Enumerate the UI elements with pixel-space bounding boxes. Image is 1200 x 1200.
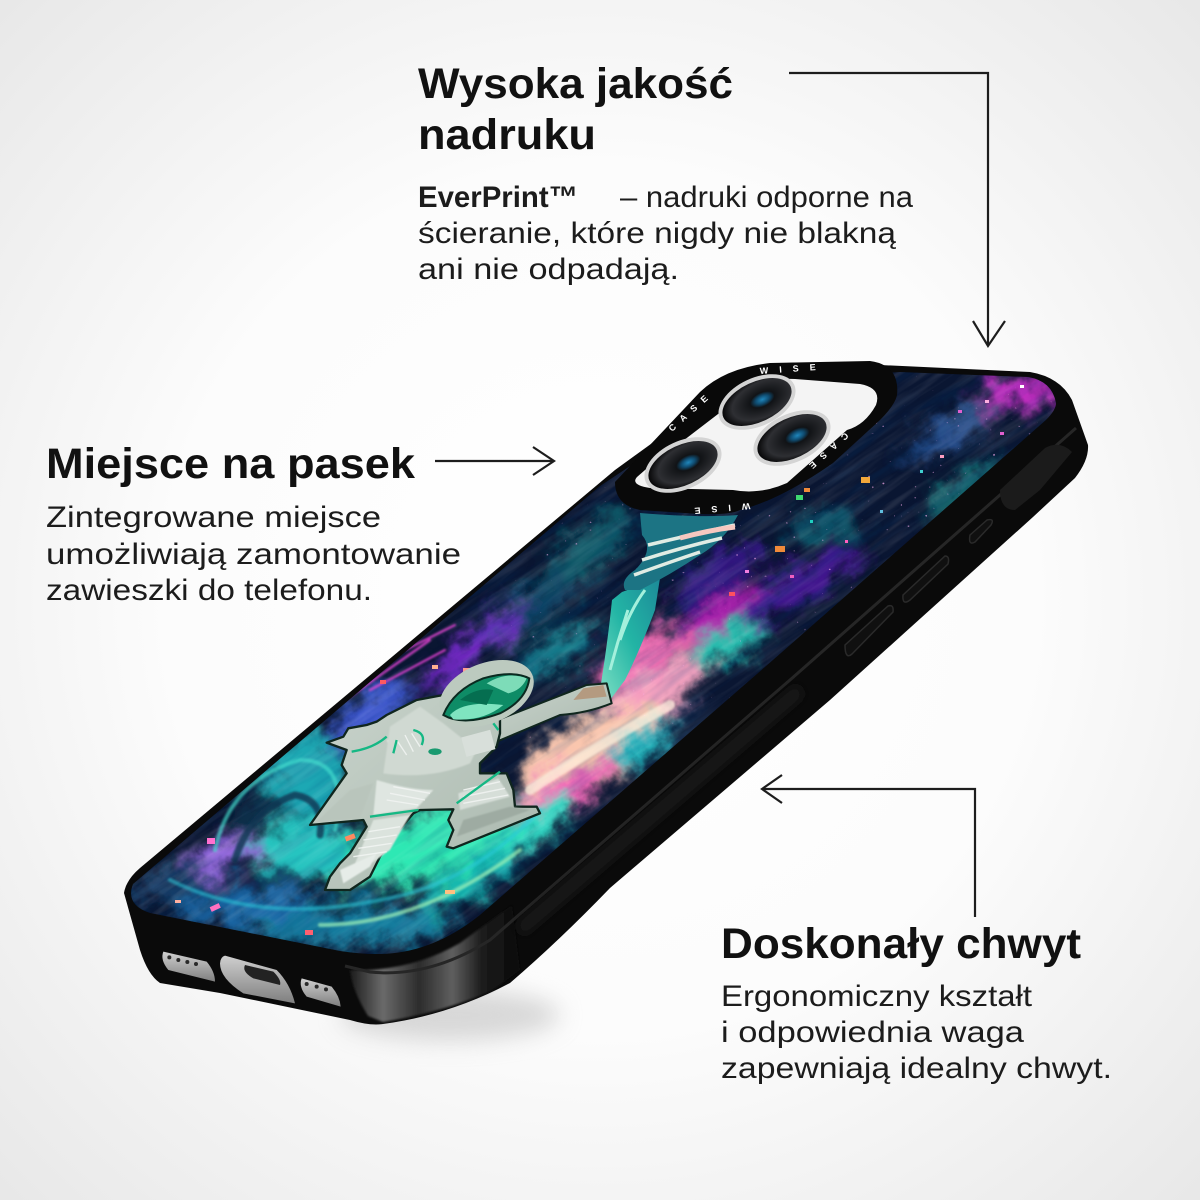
text block: strap slot: umożliwiają zamontowanie xyxy=(46,538,461,571)
text block: print quality xyxy=(418,181,913,286)
ports xyxy=(162,952,341,1007)
text block: print quality: ani nie odpadają. xyxy=(418,253,679,286)
camera glass xyxy=(635,379,877,491)
printed artwork xyxy=(131,361,1056,954)
arrow: grip xyxy=(762,775,975,917)
heading: grip: Doskonały chwyt xyxy=(721,920,1081,968)
text block: print quality: EverPrint™ xyxy=(418,181,578,214)
brand lettering: WISE xyxy=(759,361,827,376)
star specks xyxy=(512,376,1052,738)
text block: grip: Ergonomiczny kształt xyxy=(721,980,1033,1013)
brand lettering xyxy=(667,361,850,517)
text block: strap slot xyxy=(46,501,461,607)
text block: print quality: ścieranie, które nigdy nie blakną xyxy=(418,217,896,250)
text block: grip: zapewniają idealny chwyt. xyxy=(721,1052,1112,1085)
heading: print quality xyxy=(418,60,733,159)
phone in case xyxy=(124,361,1088,1024)
case rim highlight xyxy=(345,428,1076,973)
text block: strap slot: zawieszki do telefonu. xyxy=(46,574,372,607)
side buttons xyxy=(845,445,1072,656)
swirl strokes xyxy=(170,625,670,925)
brand lettering: CASE xyxy=(801,431,850,476)
astronaut xyxy=(310,647,612,890)
astronaut: arm xyxy=(493,683,612,742)
speaker right xyxy=(301,978,341,1007)
case body xyxy=(124,362,1088,1024)
text block: print quality: – nadruki odporne na xyxy=(620,181,913,214)
heading: print quality: Wysoka jakość xyxy=(418,60,733,108)
directional brush streaks xyxy=(132,372,1054,954)
text block: strap slot: Zintegrowane miejsce xyxy=(46,501,381,534)
text block: grip: i odpowiednia waga xyxy=(721,1016,1024,1049)
lens: left xyxy=(636,426,730,504)
arrow: strap slot xyxy=(435,447,554,475)
arrow: print quality xyxy=(789,73,1005,346)
side wall texture xyxy=(520,690,800,930)
astronaut: suit shading xyxy=(340,707,528,884)
heading: print quality: nadruku xyxy=(418,111,596,159)
USB port xyxy=(220,956,295,1003)
water stream and tornado xyxy=(600,513,738,700)
lens: top xyxy=(710,363,804,441)
stars xyxy=(175,385,1024,935)
camera island xyxy=(615,361,897,517)
glossy lower corner xyxy=(350,905,520,1022)
brand lettering: WISE xyxy=(683,501,751,517)
heading: strap slot: Miejsce na pasek xyxy=(46,440,415,488)
astronaut: ribbing xyxy=(353,733,508,857)
astronaut: helmet xyxy=(441,660,534,721)
phone shadow xyxy=(340,989,560,1041)
text block: grip xyxy=(721,980,1112,1085)
nebula colours xyxy=(135,379,1062,947)
speaker left xyxy=(162,952,215,982)
astronaut: body and legs xyxy=(310,695,540,890)
lens: right xyxy=(745,399,839,477)
brand lettering: CASE xyxy=(667,388,716,433)
